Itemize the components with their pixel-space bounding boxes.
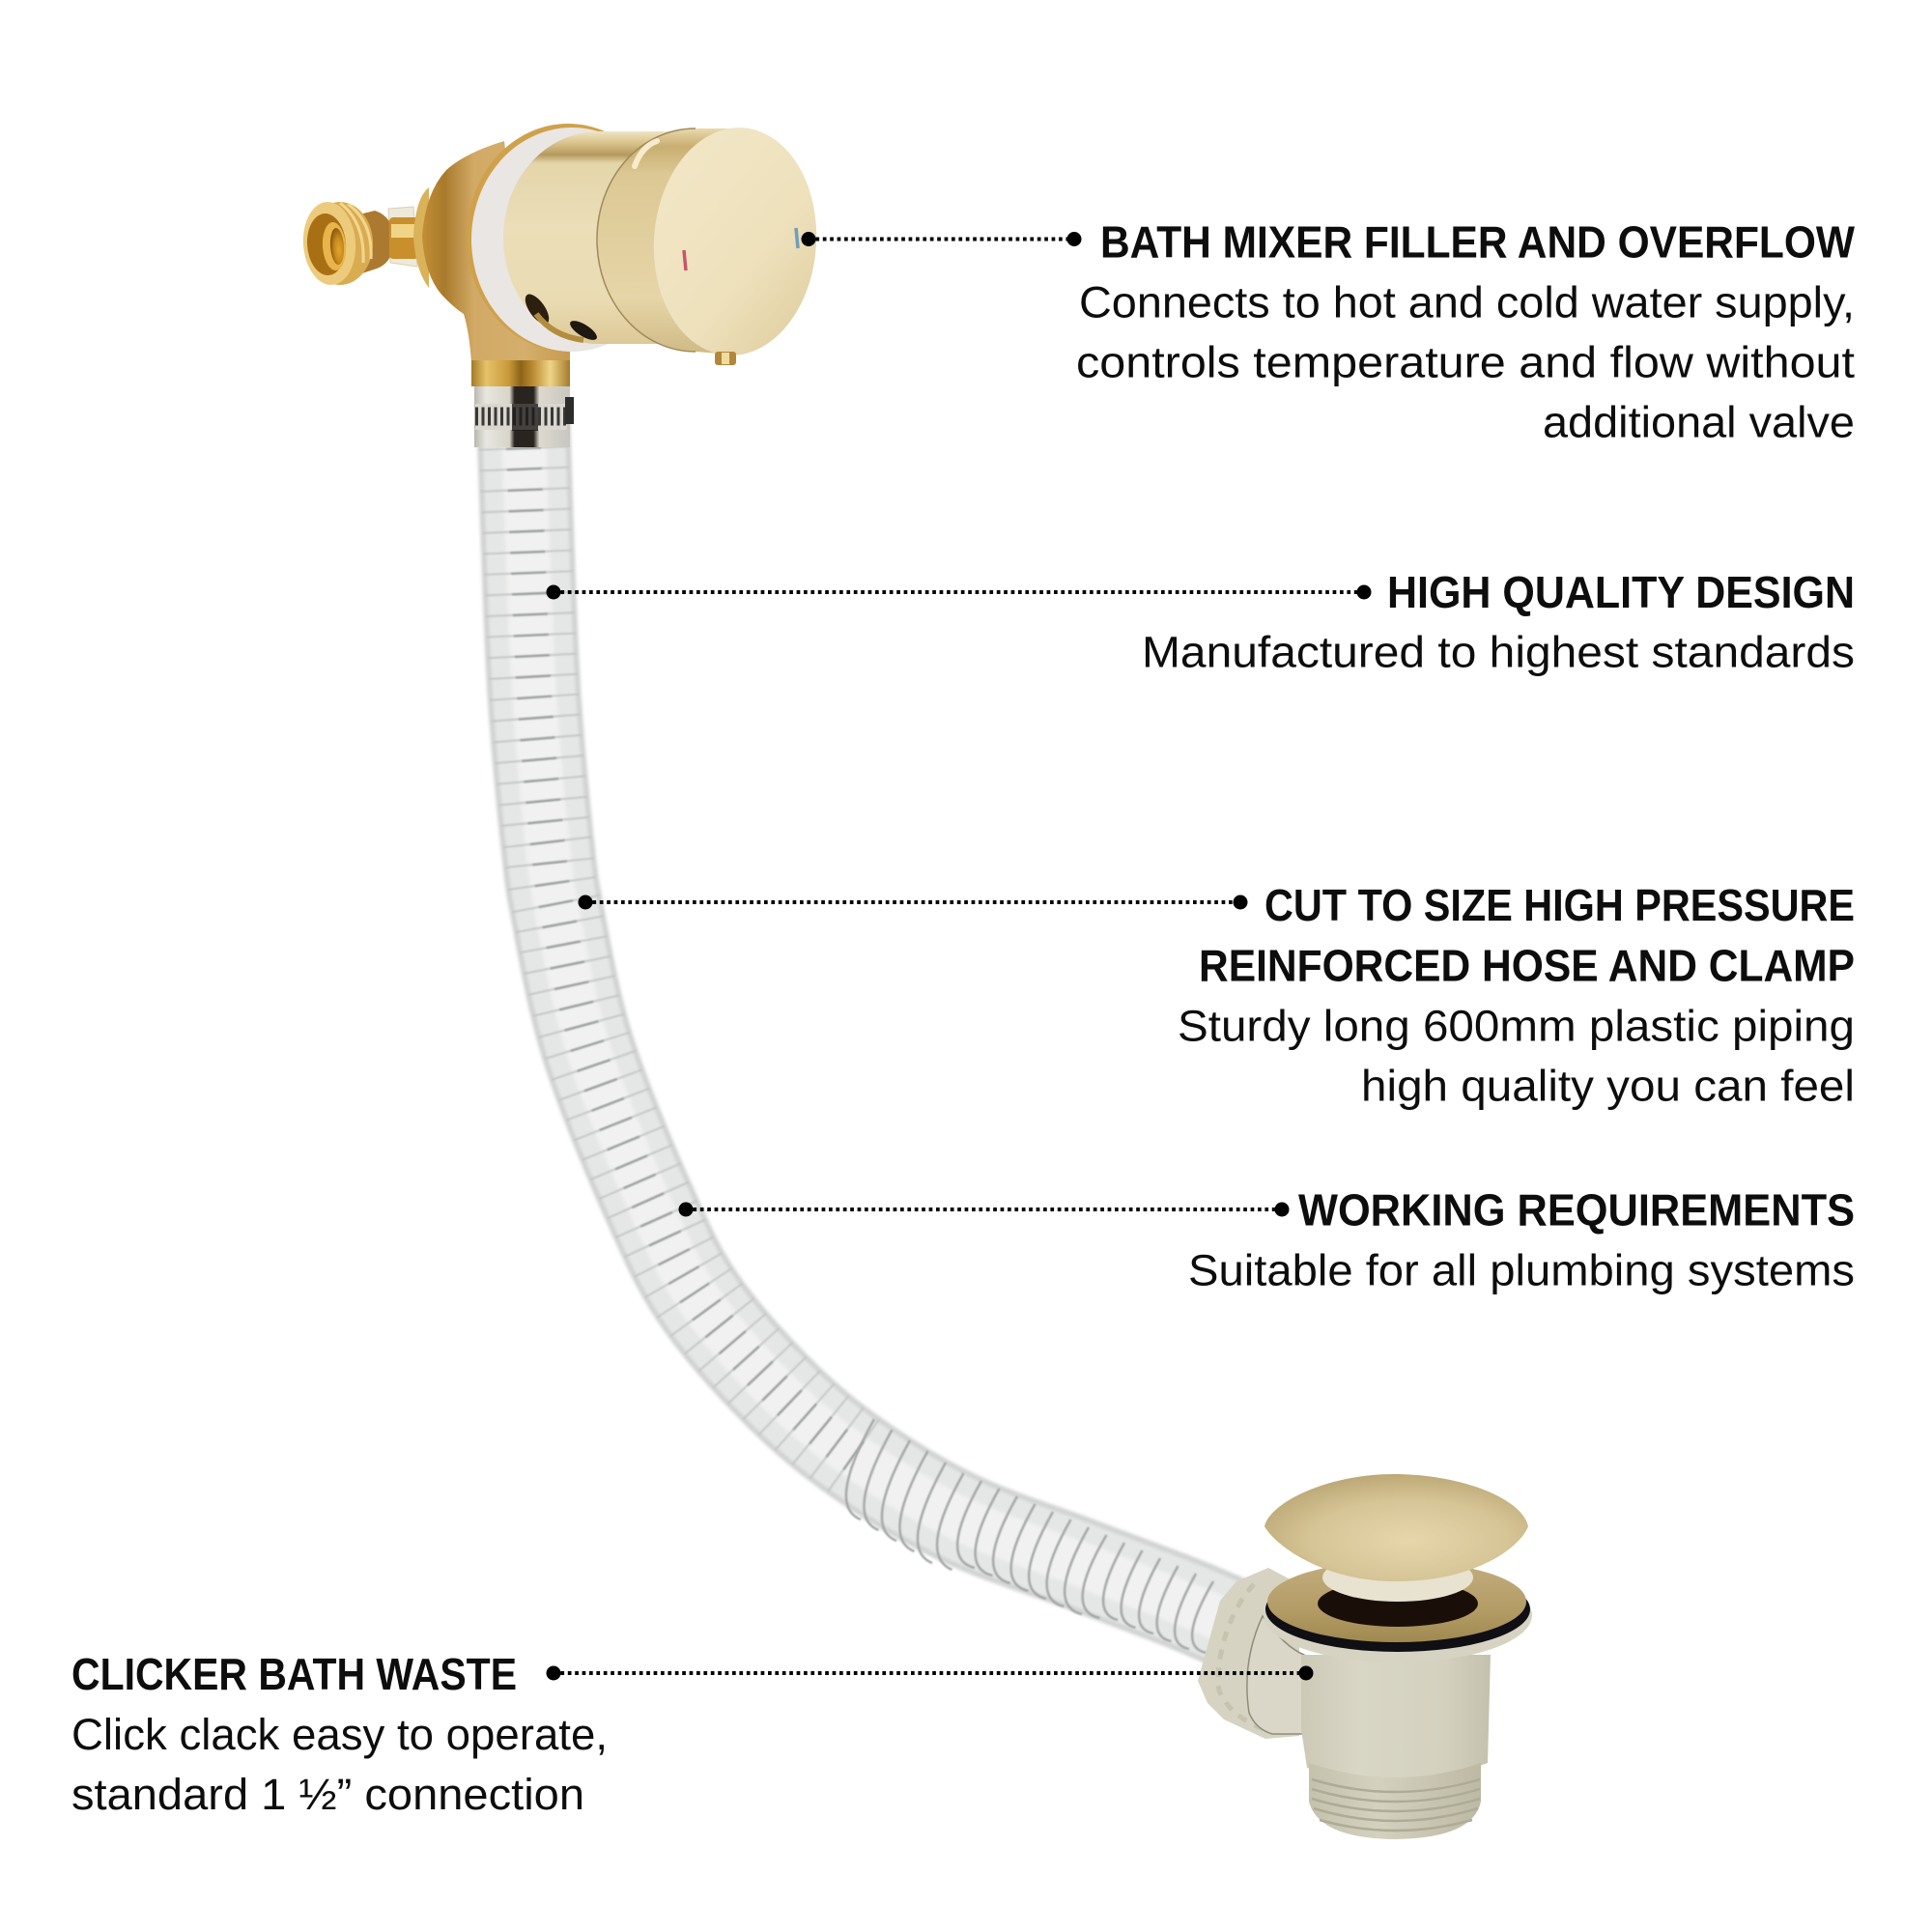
knob face — [646, 122, 824, 361]
plug cap — [1264, 1474, 1528, 1581]
valve cylinder — [503, 131, 710, 344]
leader dot end — [1066, 232, 1082, 246]
description — [1178, 1001, 1855, 1111]
leader dot start — [578, 895, 593, 910]
hot marker — [684, 250, 686, 270]
cold marker — [796, 228, 798, 248]
clicker waste — [1198, 1474, 1532, 1839]
plug opening — [1318, 1580, 1478, 1627]
leader dot start — [678, 1202, 694, 1217]
gold rim behind ring — [467, 124, 669, 352]
plug stem — [1322, 1553, 1473, 1602]
description — [71, 1710, 608, 1819]
description: Suitable for all plumbing systems — [1188, 1246, 1855, 1294]
hose tube — [524, 425, 1251, 1633]
description: standard 1 ½” connection — [71, 1770, 584, 1819]
leader line — [809, 238, 1074, 242]
waste body — [1301, 1655, 1491, 1781]
heading: HIGH QUALITY DESIGN — [1387, 567, 1855, 617]
locating pin — [715, 352, 736, 365]
black seal — [1265, 1567, 1530, 1652]
white ring — [471, 128, 672, 352]
callout: working requirements — [678, 1184, 1855, 1294]
inlet fitting — [300, 200, 418, 287]
hose clamp — [474, 384, 574, 447]
leader line — [554, 590, 1364, 594]
heading: BATH MIXER FILLER AND OVERFLOW — [1100, 216, 1856, 267]
leader line — [554, 1671, 1306, 1675]
leader dot end — [1298, 1665, 1314, 1681]
brass flange — [1267, 1561, 1526, 1642]
description: additional valve — [1543, 398, 1855, 446]
leader dot end — [1275, 1202, 1289, 1217]
heading: REINFORCED HOSE AND CLAMP — [1199, 941, 1855, 991]
beige rim — [1264, 1568, 1532, 1662]
bath mixer valve — [300, 122, 824, 447]
heading: WORKING REQUIREMENTS — [1298, 1184, 1855, 1235]
heading — [1199, 880, 1855, 991]
leader line — [686, 1208, 1282, 1211]
brass collar — [471, 360, 570, 386]
description: Sturdy long 600mm plastic piping — [1178, 1001, 1855, 1051]
callout: clicker bath waste — [71, 1649, 1314, 1819]
description: controls temperature and flow without — [1076, 338, 1856, 386]
leader dot start — [802, 232, 815, 246]
heading: CLICKER BATH WASTE — [71, 1649, 517, 1699]
knob barrel — [597, 128, 736, 355]
description: Connects to hot and cold water supply, — [1079, 278, 1855, 327]
leader dot end — [1233, 895, 1248, 910]
hose — [524, 425, 1251, 1653]
waste elbow — [1247, 1616, 1304, 1734]
description: high quality you can feel — [1361, 1061, 1855, 1111]
waste thread — [1309, 1763, 1481, 1839]
description — [1076, 278, 1856, 446]
callout: high quality design — [547, 567, 1855, 676]
leader dot start — [547, 1665, 560, 1681]
leader line — [585, 900, 1240, 904]
hose ribs lower — [846, 1419, 1213, 1653]
heading: CUT TO SIZE HIGH PRESSURE — [1264, 880, 1855, 930]
brass body — [413, 141, 570, 363]
leader dot start — [547, 585, 560, 599]
description: Manufactured to highest standards — [1142, 628, 1855, 676]
hose nut — [1198, 1568, 1299, 1739]
leader dot end — [1356, 585, 1372, 599]
callout: hose — [578, 880, 1855, 1111]
description: Click clack easy to operate, — [71, 1710, 608, 1759]
callout: bath mixer — [802, 216, 1856, 446]
vent slots — [521, 291, 600, 344]
hose ribs upper — [524, 447, 869, 1466]
